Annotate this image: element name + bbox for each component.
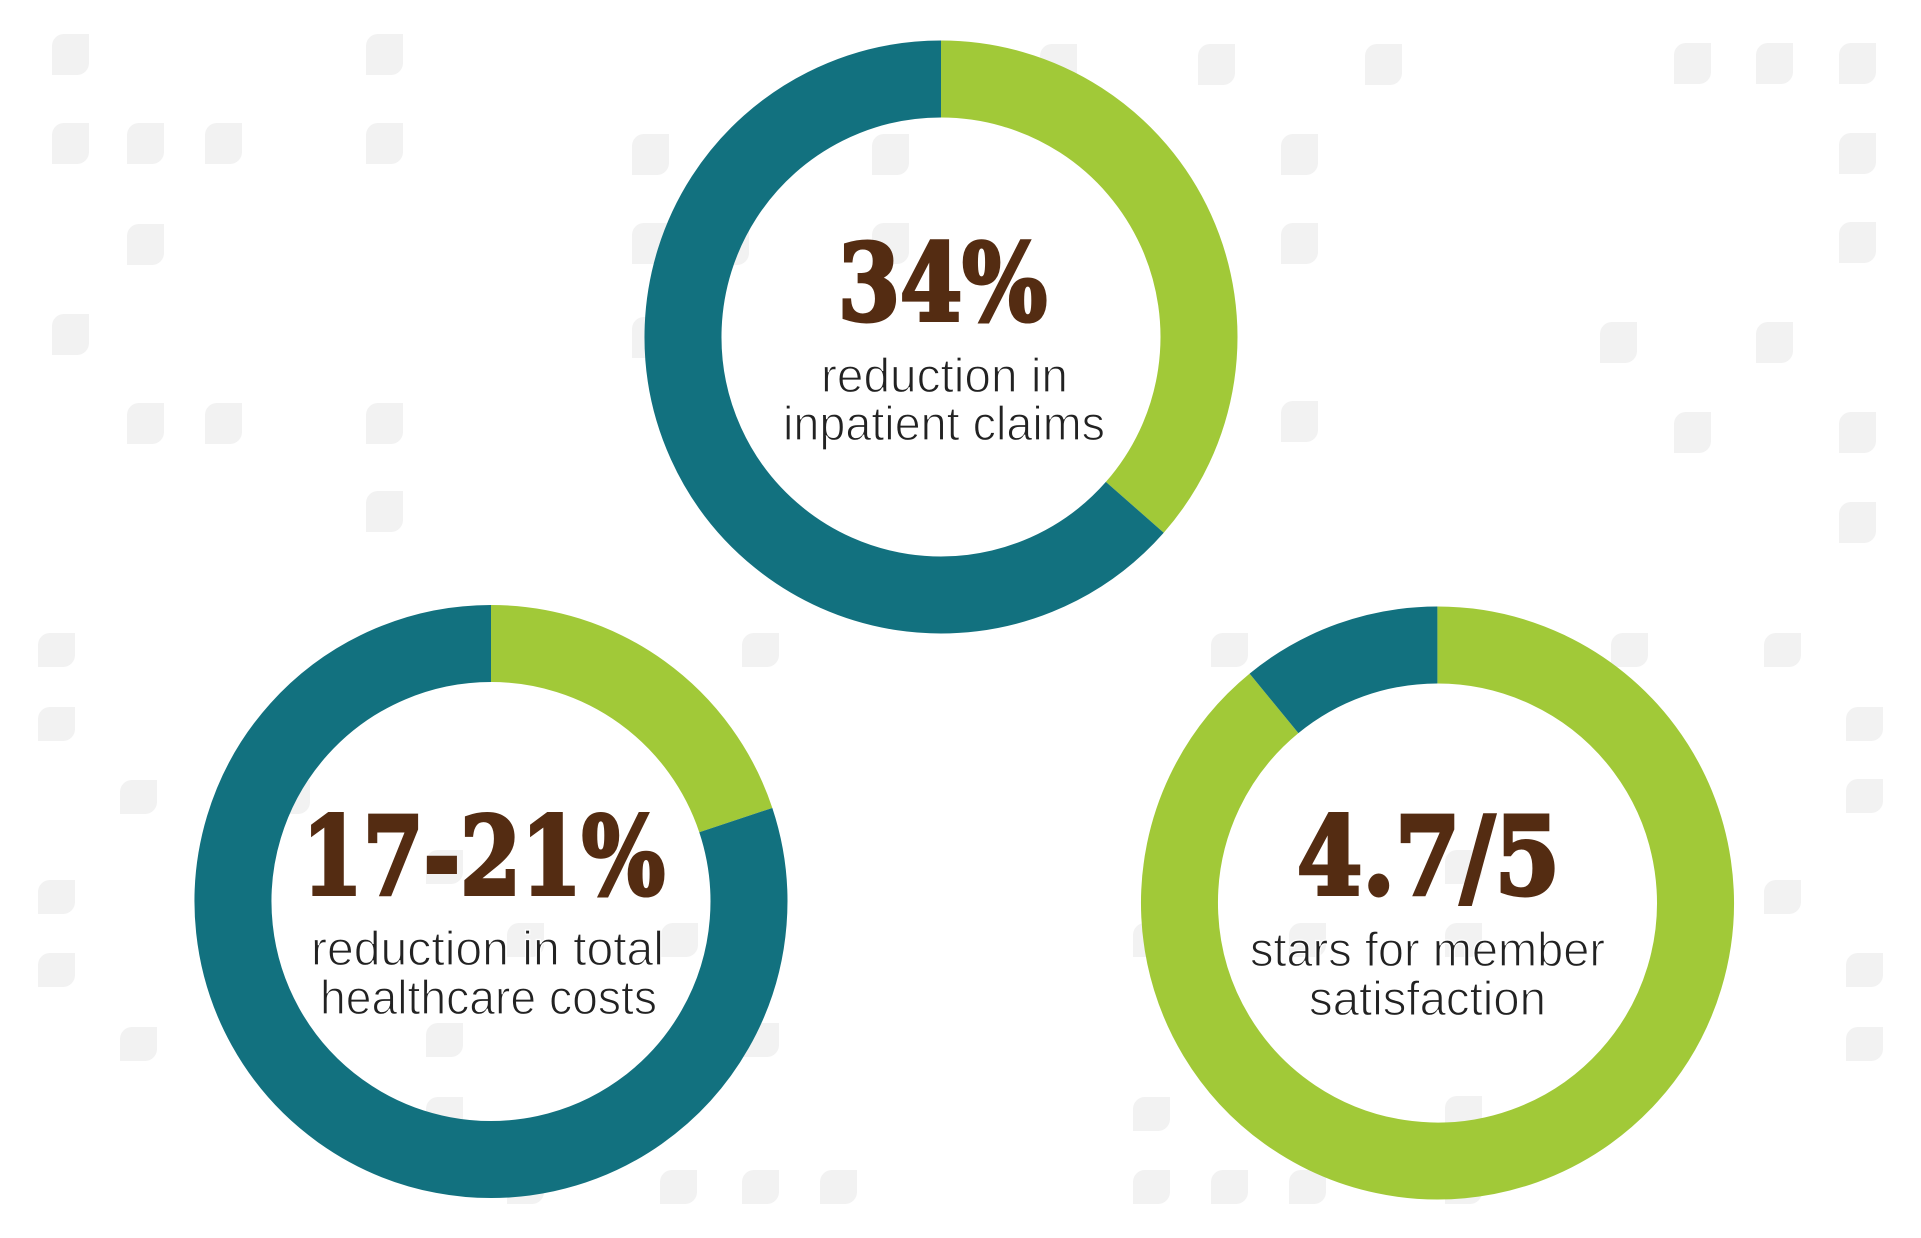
panel: member satisfaction stat	[1179, 645, 1695, 1161]
stat value: 34%: 34%	[838, 220, 1047, 345]
panel: inpatient claims stat	[683, 79, 1199, 595]
stat caption: reduction in total healthcare costs: healthcare costs	[320, 972, 657, 1025]
stat caption: reduction in inpatient claims: reduction in	[821, 350, 1068, 403]
stat caption: reduction in total healthcare costs: reduction in total	[311, 923, 664, 976]
stat caption: stars for member satisfaction	[1250, 924, 1605, 1026]
donut chart: 34% inpatient claims	[683, 79, 1199, 595]
panel: total healthcare costs stat	[233, 644, 749, 1160]
stat caption: reduction in inpatient claims: inpatient claims	[783, 398, 1105, 451]
stat caption: stars for member satisfaction: satisfaction	[1309, 973, 1546, 1026]
stat caption: reduction in total healthcare costs	[311, 923, 664, 1025]
donut chart: 4.7 of 5 member satisfaction	[1179, 645, 1695, 1161]
stat caption: stars for member satisfaction: stars for member	[1250, 924, 1605, 977]
stat caption: reduction in inpatient claims	[783, 350, 1105, 451]
donut chart: 17-21% healthcare costs	[233, 644, 749, 1160]
stat value: 4.7/5: 4.7/5	[1297, 794, 1560, 920]
stat value: 17-21%: 17-21%	[302, 794, 665, 920]
